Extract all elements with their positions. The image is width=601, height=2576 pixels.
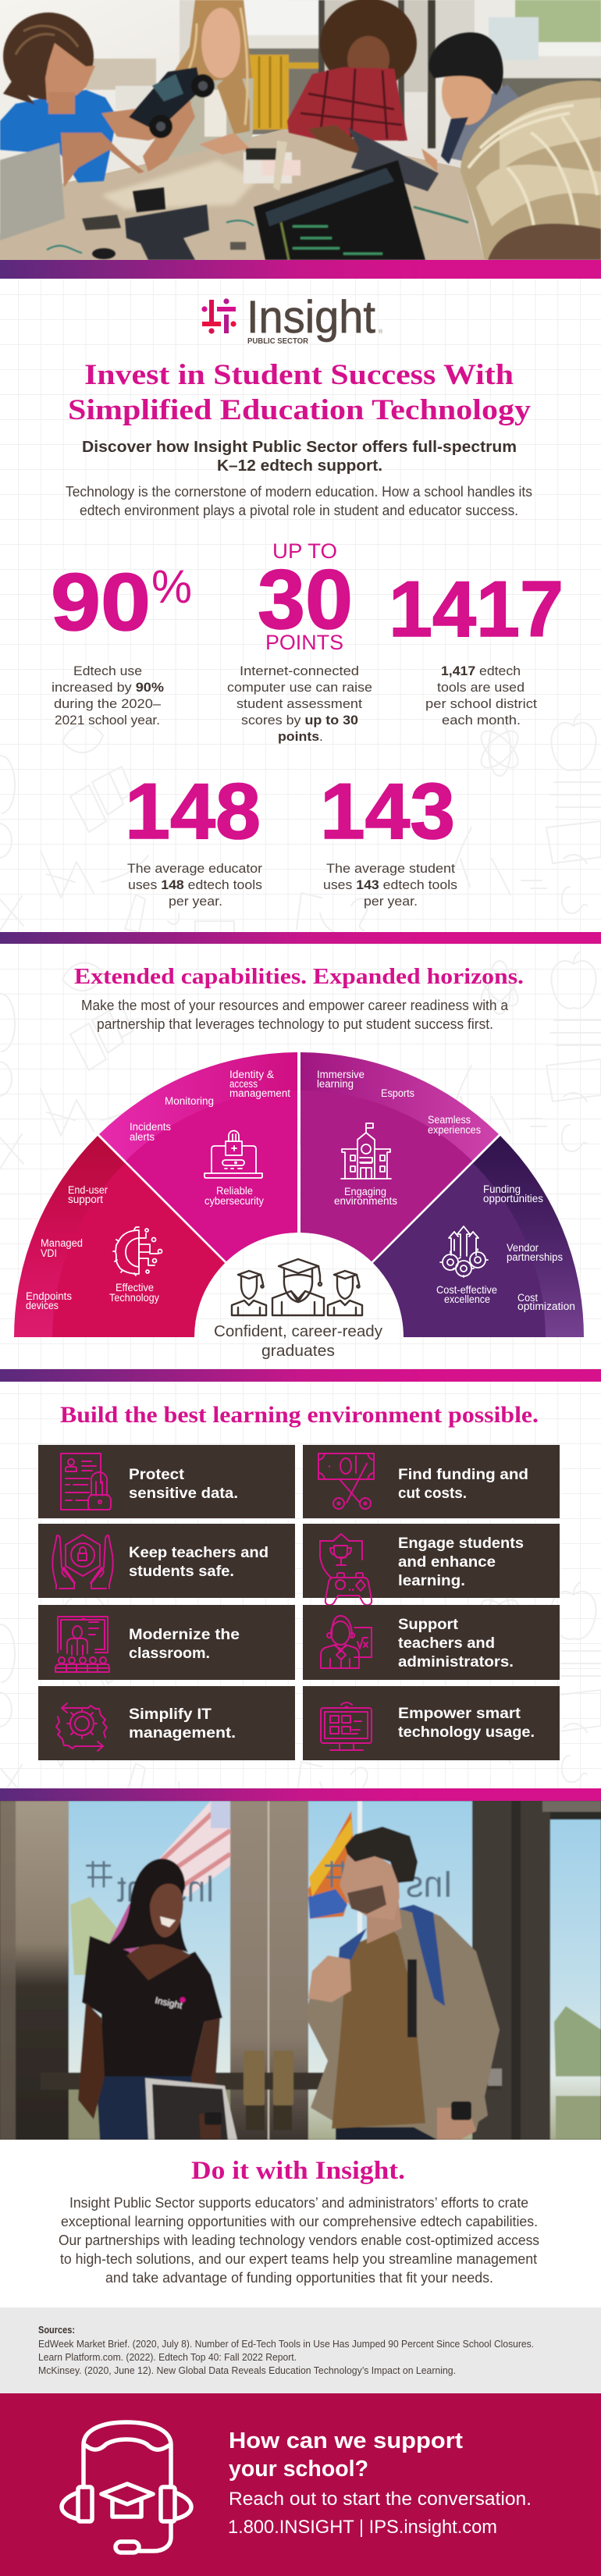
closing paragraph: Insight Public Sector supports educators’ and administrators’ efforts to crate	[69, 2195, 528, 2211]
segment: engaging environments	[300, 1052, 499, 1261]
logo: Insight Public Sector: PUBLIC SECTOR	[247, 336, 308, 346]
card: support teachers	[303, 1605, 560, 1680]
stat: up to 30 points: 30	[258, 552, 353, 646]
segment: reliable cybersecurity: Identity &	[229, 1069, 274, 1080]
segment: effective technology: devices	[26, 1300, 59, 1311]
intro text: edtech environment plays a pivotal role in student and educator success.	[80, 503, 518, 518]
segment: effective technology: End-user	[68, 1184, 108, 1196]
segment: cost-effective excellence	[373, 1136, 584, 1337]
stat: 148 educator tools	[125, 768, 262, 909]
stat: up to 30 points: student assessment	[236, 696, 362, 711]
segment: cost-effective excellence: excellence	[444, 1293, 490, 1305]
stat: 1417 tools	[389, 566, 564, 728]
call to action panel	[0, 2393, 601, 2576]
segment: reliable cybersecurity: Incidents	[130, 1121, 171, 1133]
title: Simplified Education Technology	[68, 394, 532, 426]
segment: reliable cybersecurity: Monitoring	[165, 1095, 214, 1107]
intro text: Technology is the cornerstone of modern education. How a school handles its	[66, 484, 532, 500]
segment: effective technology	[14, 1136, 225, 1337]
segment: reliable cybersecurity: access	[229, 1078, 258, 1090]
man	[336, 2127, 437, 2140]
capabilities intro text	[81, 998, 509, 1032]
stat: 90 percent: increased by 90%	[52, 680, 164, 695]
stat: 90 percent: %	[151, 560, 192, 613]
segment: engaging environments: Immersive	[317, 1069, 365, 1080]
segment: engaging environments: Esports	[381, 1087, 414, 1099]
segment: engaging environments: learning	[317, 1078, 354, 1090]
stat: 1417 tools: per school district	[425, 696, 537, 711]
gradient bar under hero	[0, 260, 601, 279]
stat: up to 30 points: POINTS	[265, 631, 343, 654]
logo: Insight Public Sector: ®	[379, 329, 383, 335]
segment: engaging environments: experiences	[428, 1124, 481, 1136]
tablet	[347, 127, 439, 191]
left column	[0, 1801, 69, 2140]
sources panel: Sources:	[38, 2324, 75, 2336]
sources panel: EdWeek Market Brief. (2020, July 8). Number of Ed-Tech Tools in Use Has Jumped 90 Percent Since School Closures.	[38, 2338, 534, 2350]
call to action panel: Reach out to start the conversation.	[229, 2489, 532, 2510]
segment: reliable cybersecurity: alerts	[130, 1131, 155, 1143]
segment: reliable cybersecurity: cybersecurity	[204, 1194, 264, 1207]
parts on table	[244, 152, 292, 183]
stat: 148 educator tools: per year.	[169, 894, 222, 909]
icon: document and lock	[61, 1453, 111, 1510]
icon: smart monitor with wifi	[321, 1703, 372, 1750]
stat: up to 30 points: Internet-connected	[240, 664, 359, 678]
card: empower smart usage: technology usage.	[398, 1724, 535, 1741]
stat: 90 percent: during the 2020–	[54, 696, 162, 711]
graduates caption: graduates	[261, 1343, 335, 1360]
gradient bar above learning environment	[0, 1369, 601, 1382]
closing paragraph	[59, 2195, 539, 2286]
call to action panel: How can we support	[229, 2428, 463, 2453]
segment: effective technology: Managed	[41, 1237, 83, 1249]
segment: reliable cybersecurity: management	[229, 1087, 290, 1099]
intro text	[66, 484, 532, 518]
semicircle capabilities diagram	[14, 1052, 584, 1360]
boy left	[0, 90, 117, 183]
glass	[67, 1801, 231, 2073]
segment: cost-effective excellence: Cost	[517, 1292, 538, 1304]
icon: laptop with lock	[204, 1130, 262, 1178]
stat: up to 30 points: computer use can raise	[227, 680, 372, 695]
flags	[159, 1801, 231, 1897]
stat: 1417 tools: tools are used	[437, 680, 525, 695]
segment: effective technology: Endpoints	[26, 1290, 72, 1302]
segment: reliable cybersecurity	[99, 1052, 297, 1261]
graduates caption: Confident, career-ready	[214, 1323, 382, 1340]
segment: cost-effective excellence: opportunities	[483, 1193, 543, 1204]
photo: Insight staff member talking with a student at doors: Insight	[117, 1869, 215, 1910]
icon: teacher and math board	[321, 1616, 372, 1668]
stat: 1417 tools: 1417	[389, 566, 564, 653]
woman	[95, 2061, 195, 2140]
closing paragraph: and take advantage of funding opportunities that fit your needs.	[105, 2270, 493, 2286]
photo: Insight staff member talking with a student at doors: Ins	[406, 1864, 453, 1905]
segment: effective technology: VDI	[41, 1247, 57, 1259]
segment: cost-effective excellence: optimization	[517, 1300, 575, 1312]
stat: 148 educator tools: The average educator	[127, 861, 262, 876]
card: keep safe: students safe.	[129, 1564, 234, 1580]
call to action panel: 1.800.INSIGHT | IPS.insight.com	[228, 2517, 497, 2538]
card: keep safe: Keep teachers and	[129, 1545, 268, 1561]
stat: 1417 tools: each month.	[442, 713, 521, 728]
girl afro	[320, 0, 417, 89]
segment: cost-effective excellence: Cost-effective	[436, 1283, 497, 1296]
logo: Insight Public Sector: Insight	[247, 292, 375, 343]
stat: 90 percent	[51, 557, 192, 728]
icon: hands with hexagon lock	[52, 1535, 113, 1589]
logo: Insight Public Sector	[201, 292, 383, 346]
icon: banknote and scissors	[318, 1453, 374, 1509]
card: protect sensitive data	[38, 1445, 295, 1518]
sources panel: Learn Platform.com. (2022). Edtech Top 40: Fall 2022 Report.	[38, 2351, 297, 2363]
icon: teacher at board with audience	[55, 1617, 109, 1672]
card: protect sensitive data: Protect	[129, 1467, 185, 1483]
segment: cost-effective excellence: Funding	[483, 1183, 521, 1195]
title	[68, 359, 532, 426]
stat: up to 30 points: scores by up to 30	[241, 713, 358, 728]
stat: 143 student tools	[320, 768, 457, 909]
graduates icon	[232, 1259, 362, 1315]
icon: headset with graduation cap	[62, 2422, 191, 2553]
card: support teachers: teachers and	[398, 1635, 495, 1652]
segment: cost-effective excellence: partnerships	[507, 1251, 563, 1263]
capabilities intro text: partnership that leverages technology to put student success first.	[97, 1016, 493, 1032]
subtitle: K–12 edtech support.	[217, 457, 382, 475]
title: Invest in Student Success With	[84, 359, 514, 391]
blond hair foreground	[461, 80, 601, 260]
card: find funding: Find funding and	[398, 1467, 528, 1483]
subtitle: Discover how Insight Public Sector offers full-spectrum	[82, 439, 517, 456]
icon: gear with arrows	[56, 1703, 107, 1751]
card: protect sensitive data: sensitive data.	[129, 1485, 238, 1502]
closing paragraph: to high-tech solutions, and our expert teams help you streamline management	[60, 2251, 537, 2267]
white lower section background	[0, 2140, 601, 2307]
door handle	[41, 2073, 501, 2090]
left laptop	[0, 143, 65, 240]
segment: engaging environments: Seamless	[428, 1114, 471, 1126]
card: engage students: Engage students	[398, 1535, 524, 1552]
icon: trophy shield and game controller	[320, 1534, 372, 1605]
closing paragraph: exceptional learning opportunities with our comprehensive edtech capabilities.	[61, 2214, 538, 2229]
card: empower smart usage	[303, 1686, 560, 1760]
sources panel: McKinsey. (2020, June 12). New Global Data Reveals Education Technology’s Impact on Learning.	[38, 2364, 456, 2376]
graduates caption	[214, 1323, 382, 1360]
card: support teachers: Support	[398, 1617, 459, 1633]
segment: effective technology: support	[68, 1194, 103, 1205]
card: modernize classroom	[38, 1605, 295, 1680]
heading: build the best learning environment: Build the best learning environment possible.	[60, 1402, 539, 1428]
center laptop	[254, 160, 425, 260]
reversed logo marks on glass	[86, 1861, 112, 1888]
card: find funding	[303, 1445, 560, 1518]
card: modernize classroom: classroom.	[129, 1646, 210, 1662]
segment: reliable cybersecurity: Reliable	[216, 1184, 253, 1197]
icon: gears with arrows	[440, 1226, 488, 1277]
card grid	[38, 1445, 560, 1760]
closing paragraph: Our partnerships with leading technology vendors enable cost-optimized access	[59, 2233, 539, 2248]
folder	[145, 2078, 237, 2140]
robot car	[129, 67, 201, 129]
card: engage students: and enhance	[398, 1554, 496, 1571]
stat: up to 30 points: UP TO	[272, 539, 337, 563]
icon: gear circuit	[113, 1227, 162, 1276]
stat: 143 student tools: The average student	[326, 861, 455, 876]
stat: 143 student tools: per year.	[364, 894, 418, 909]
photo: Insight staff member talking with a student at doors	[0, 1801, 601, 2140]
card: simplify IT	[38, 1686, 295, 1760]
segment: cost-effective excellence: Vendor	[507, 1242, 539, 1254]
card: simplify IT: management.	[129, 1725, 236, 1742]
table	[0, 129, 484, 260]
girl long hair	[174, 0, 253, 81]
sources panel	[0, 2307, 601, 2393]
card: modernize classroom: Modernize the	[129, 1627, 240, 1643]
gradient bar above photo	[0, 1788, 601, 1801]
mullions	[230, 1801, 308, 2140]
capabilities intro text: Make the most of your resources and empower career readiness with a	[81, 998, 509, 1013]
stat: 90 percent: 2021 school year.	[55, 713, 160, 728]
card: keep safe	[38, 1524, 295, 1598]
stat: up to 30 points: points.	[278, 729, 323, 744]
hero photo: students building a robot car around a table	[0, 0, 601, 260]
icon: school building	[341, 1123, 391, 1179]
stat: 143 student tools: 143	[320, 768, 455, 856]
subtitle	[82, 439, 517, 475]
segment: engaging environments: Engaging	[344, 1185, 386, 1197]
stat: 148 educator tools: uses 148 edtech tools	[128, 877, 262, 892]
segment: engaging environments: environments	[334, 1194, 397, 1207]
boy right	[451, 84, 519, 161]
card: engage students: learning.	[398, 1573, 465, 1589]
call to action panel: your school?	[229, 2457, 368, 2482]
card: find funding: cut costs.	[398, 1485, 467, 1502]
hand and arm holding car	[101, 101, 191, 141]
card: support teachers: administrators.	[398, 1654, 514, 1670]
stat: 90 percent: Edtech use	[73, 664, 142, 678]
segment: effective technology: Technology	[109, 1291, 159, 1304]
stat: 90 percent: 90	[51, 557, 151, 648]
stat: 1417 tools: 1,417 edtech	[441, 664, 521, 678]
heading: extended capabilities: Extended capabilities. Expanded horizons.	[74, 964, 524, 989]
stat: 148 educator tools: 148	[125, 768, 261, 856]
stat: 143 student tools: uses 143 edtech tools	[323, 877, 457, 892]
card: engage students	[303, 1524, 560, 1605]
segment: effective technology: Effective	[116, 1281, 154, 1293]
gradient bar above capabilities	[0, 932, 601, 944]
stat: up to 30 points	[227, 539, 372, 744]
card: simplify IT: Simplify IT	[129, 1706, 212, 1723]
card: empower smart usage: Empower smart	[398, 1706, 521, 1722]
heading: do it with Insight: Do it with Insight.	[191, 2157, 405, 2185]
photo: Insight staff member talking with a student at doors: Insight	[154, 1994, 184, 2011]
page background grid	[0, 279, 601, 1788]
